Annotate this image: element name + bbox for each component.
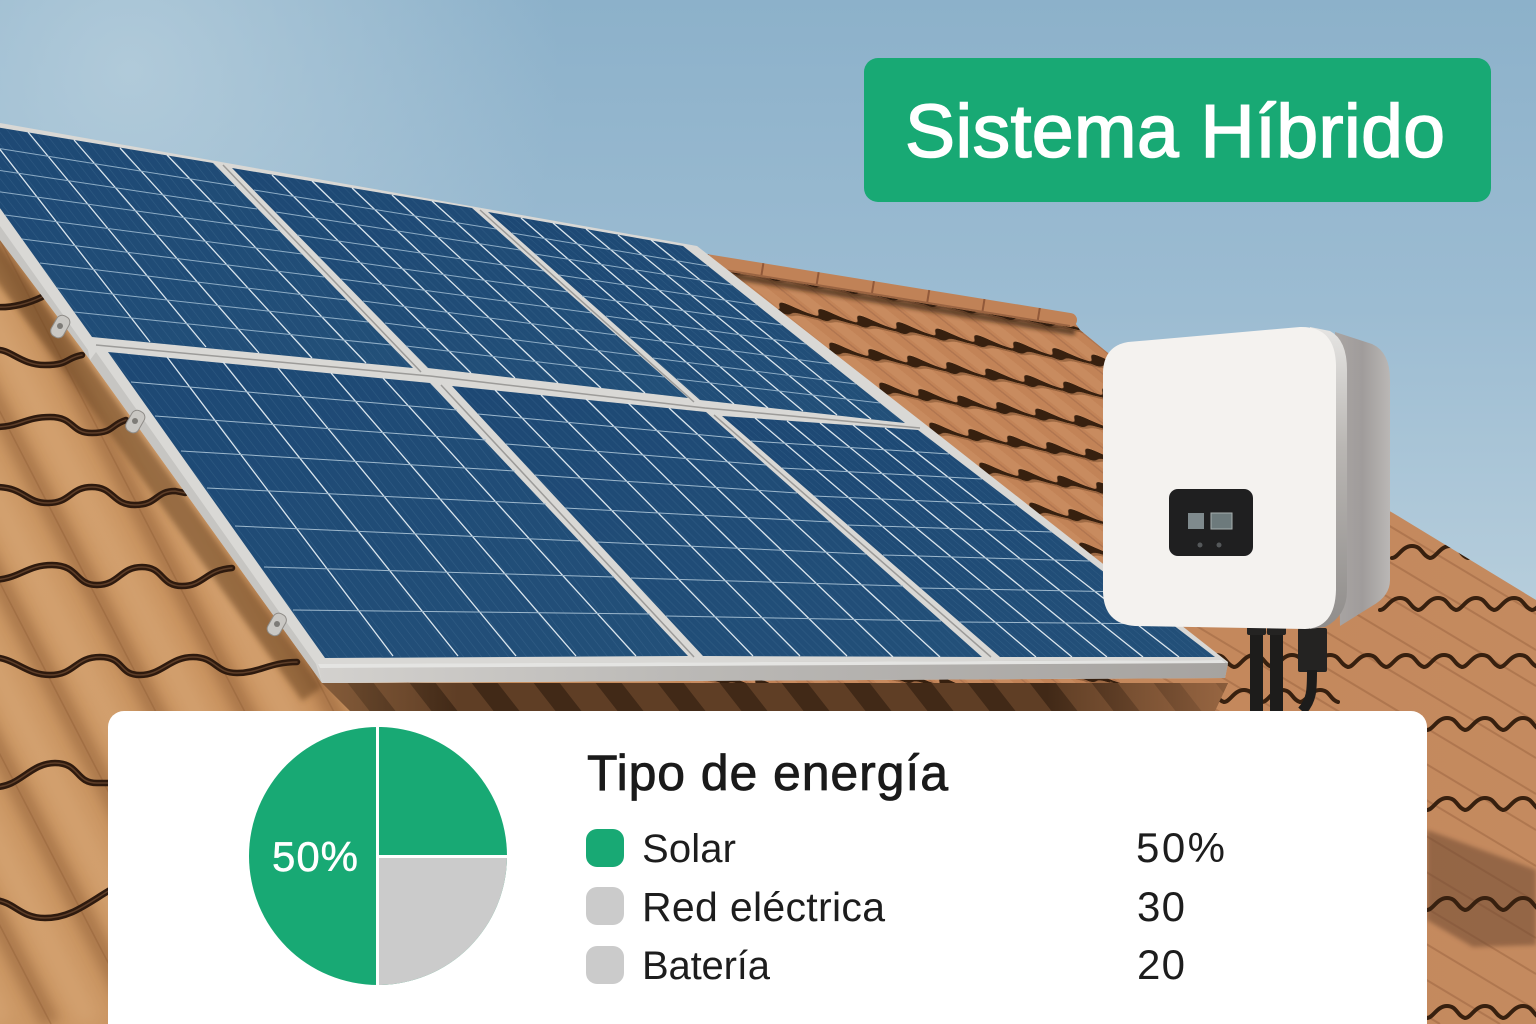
lower right tile grooves (1110, 525, 1536, 1024)
legend row: solar: 50% (1136, 824, 1225, 871)
legend row: red eléctrica: 30 (1137, 883, 1185, 930)
frame left shade (0, 226, 322, 683)
panel 4 (108, 352, 688, 658)
legend heading: Tipo de energía (587, 745, 948, 801)
inverter side edge (1310, 327, 1347, 629)
shadow under panels (322, 683, 1228, 711)
panel 1 (0, 117, 413, 368)
lower right tile rows (920, 546, 1536, 1018)
lower right shadow patch (1427, 830, 1536, 947)
legend row: red eléctrica: Red eléctrica (642, 884, 885, 930)
roof wavy tile edges on the left (0, 297, 297, 918)
left tile ridges (0, 240, 423, 1024)
inverter body back (1335, 332, 1390, 626)
frame front face (318, 660, 1228, 683)
panel shadow on roof (0, 250, 312, 694)
display (1169, 489, 1253, 556)
panel 2 (232, 168, 688, 398)
cables (1247, 625, 1327, 711)
pie chart (249, 727, 507, 985)
panel 6 (722, 416, 1215, 657)
legend row: batería (586, 941, 1185, 988)
tiled roof (0, 240, 1536, 1024)
title badge (864, 58, 1491, 202)
metal frame (0, 123, 1228, 683)
legend row: batería: Batería (642, 944, 771, 988)
roof ridge caps (706, 261, 1075, 332)
solar panel array (0, 117, 1228, 683)
legend card (108, 711, 1427, 1024)
legend row: solar (586, 824, 1225, 871)
inverter front (1103, 327, 1336, 629)
mounting clamps (48, 313, 289, 638)
panel 3 (488, 212, 905, 423)
frame joint lines (96, 165, 991, 657)
title badge: Sistema Híbrido (905, 89, 1445, 173)
legend row: red eléctrica (586, 883, 1185, 930)
legend row: batería: 20 (1137, 941, 1185, 988)
inverter (1103, 327, 1390, 711)
upper right tiles (708, 272, 1120, 683)
legend row: solar: Solar (642, 827, 736, 871)
pie chart: 50% (272, 833, 358, 880)
panel 5 (452, 386, 982, 657)
